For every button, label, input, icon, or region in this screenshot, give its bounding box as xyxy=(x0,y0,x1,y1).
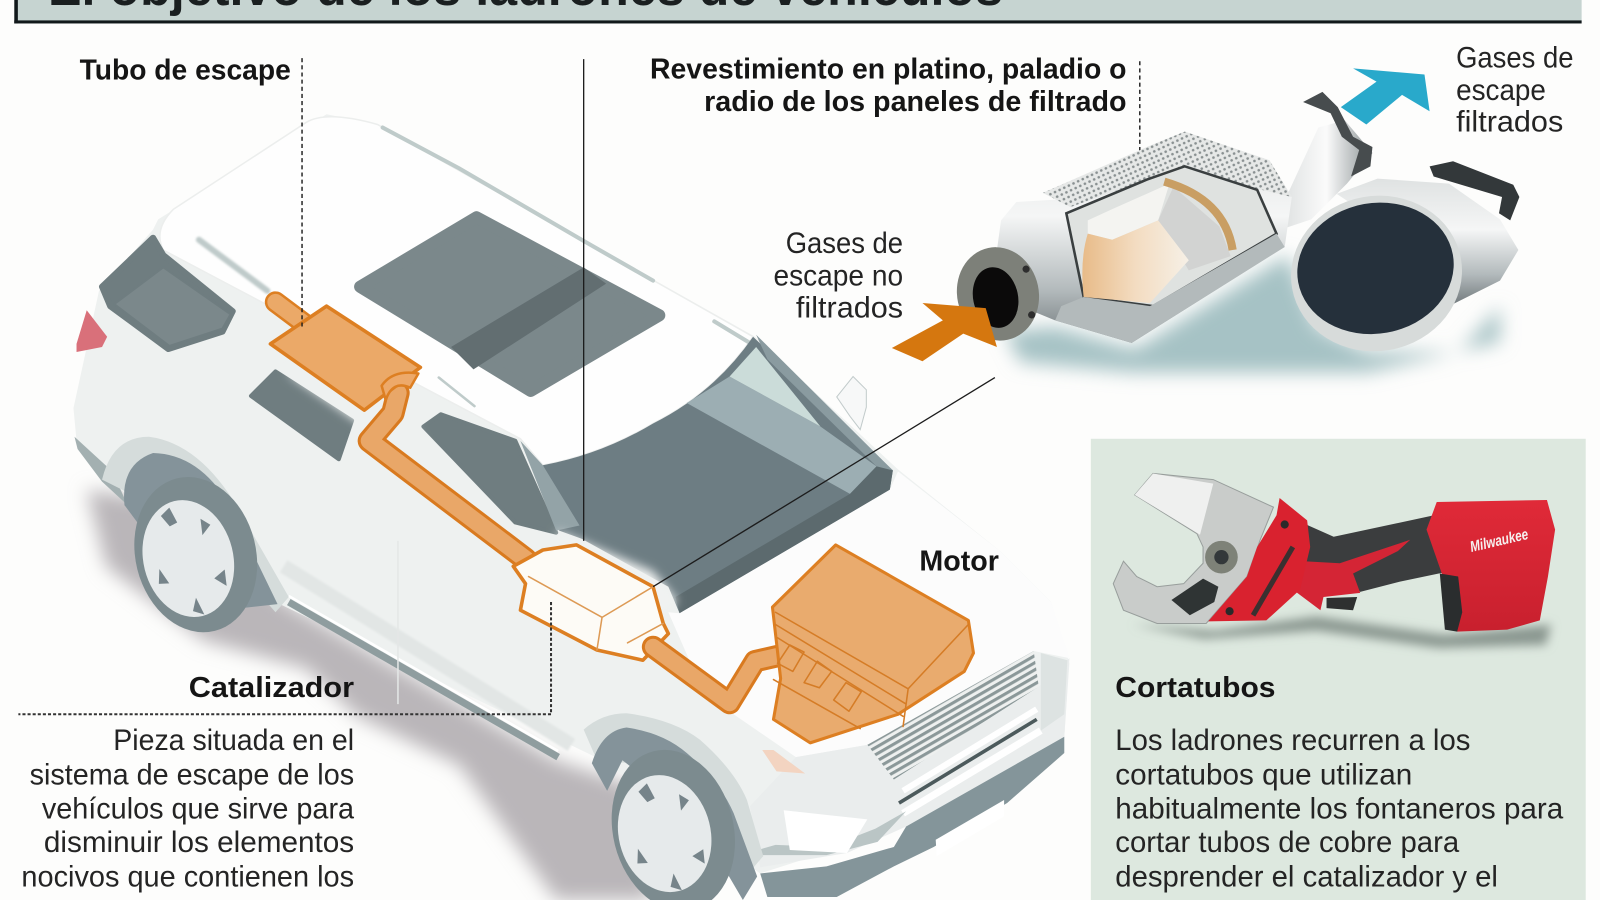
front bumper xyxy=(740,653,1069,897)
exhaust system xyxy=(270,302,973,743)
arch xyxy=(584,713,763,878)
text block: catalizador xyxy=(21,672,355,894)
label: tubo de escape: Tubo de escape xyxy=(80,55,291,87)
silver jaw xyxy=(1113,473,1273,623)
handle xyxy=(1306,514,1449,592)
perforated shield xyxy=(1043,132,1292,207)
label: gases filtrados: filtrados xyxy=(1456,106,1563,139)
leader line: tubo de escape xyxy=(301,58,303,329)
front pipe xyxy=(653,647,791,703)
blade xyxy=(1135,473,1213,535)
red grip accent xyxy=(1296,540,1410,610)
lower tray xyxy=(1055,234,1285,343)
header banner xyxy=(14,0,1582,23)
mid pipe xyxy=(369,393,526,559)
description text: Los ladrones recurren a los xyxy=(1115,724,1470,757)
second converter body xyxy=(1337,179,1518,306)
second bracket xyxy=(1430,161,1519,220)
windshield xyxy=(520,335,893,617)
description text: cortatubos que utilizan xyxy=(1115,759,1412,792)
side sill xyxy=(284,541,571,757)
description text: cortar tubos de cobre para xyxy=(1115,826,1460,859)
ground shadow xyxy=(87,490,653,900)
red body xyxy=(1427,500,1555,632)
engine xyxy=(772,545,973,743)
label: revestimiento: Revestimiento en platino, paladio o xyxy=(650,54,1127,86)
outlet pipe xyxy=(1281,120,1372,230)
label: gases no filtrados xyxy=(773,227,903,324)
label: gases no filtrados: filtrados xyxy=(796,291,903,324)
grille xyxy=(867,651,1039,780)
text block: catalizador: Catalizador xyxy=(189,672,354,704)
tail pipe xyxy=(276,302,308,327)
headlight xyxy=(762,750,805,773)
label: revestimiento xyxy=(650,54,1127,118)
text block: catalizador: Pieza situada en el xyxy=(113,724,354,757)
text block: catalizador: sistema de escape de los xyxy=(30,759,354,792)
leader line: revestimiento xyxy=(1139,61,1141,204)
label: gases filtrados: escape xyxy=(1456,74,1546,107)
arch xyxy=(102,437,289,612)
text block: catalizador: vehículos que sirve para xyxy=(42,792,355,825)
sunroof xyxy=(360,217,659,391)
head slot xyxy=(1253,547,1293,615)
label: gases filtrados xyxy=(1456,41,1573,139)
pivot xyxy=(1205,541,1238,573)
photo shadow xyxy=(1005,255,1500,372)
hood xyxy=(668,471,1069,757)
side mirror xyxy=(837,377,866,430)
front wheel xyxy=(584,713,763,900)
black badge xyxy=(1171,579,1218,615)
arrow: unfiltered gases in xyxy=(892,303,997,361)
rear wheel xyxy=(102,437,289,645)
leader line: diagonal to photo xyxy=(653,378,995,587)
roof xyxy=(160,117,753,465)
panel: cortatubos xyxy=(1091,439,1586,900)
rear lower trim xyxy=(74,437,128,505)
copper ring xyxy=(1164,182,1233,250)
lower dark tab xyxy=(1327,597,1357,610)
catalytic converter xyxy=(513,545,668,660)
icon: pipe cutter tool xyxy=(1113,473,1555,648)
fibre mat xyxy=(1158,187,1231,270)
brand: Milwaukee xyxy=(1469,526,1530,556)
text block: catalizador: nocivos que contienen los xyxy=(21,861,354,894)
roof rails xyxy=(199,128,753,406)
description text: habitualmente los fontaneros para xyxy=(1115,792,1564,825)
filter honeycomb disc xyxy=(1279,182,1474,365)
battery dark edge xyxy=(1440,573,1462,632)
red head xyxy=(1208,498,1310,621)
leader line: catalizador to photo xyxy=(583,59,585,541)
photo: cut-away catalytic converter xyxy=(948,92,1519,372)
ceramic white block xyxy=(1088,184,1169,240)
head bolts xyxy=(1226,520,1289,615)
label: gases no filtrados: Gases de xyxy=(786,227,903,260)
heading: Cortatubos xyxy=(1115,672,1276,704)
outlet bracket xyxy=(1303,92,1372,177)
side windows xyxy=(251,371,556,533)
car body xyxy=(73,114,1069,873)
tail light xyxy=(77,310,107,352)
ceramic filter core xyxy=(1082,220,1189,303)
label: revestimiento: radio de los paneles de filtrado xyxy=(704,86,1127,118)
label: motor: Motor xyxy=(919,545,999,577)
description text xyxy=(1115,724,1564,894)
label: gases filtrados: Gases de xyxy=(1456,41,1573,74)
leader line: catalizador label xyxy=(18,602,551,714)
inlet flange xyxy=(948,239,1048,348)
arrow: filtered gases out xyxy=(1341,68,1430,124)
illustration: car with exhaust system xyxy=(73,114,1069,900)
license plate xyxy=(936,800,1004,856)
rear window xyxy=(102,238,233,349)
muffler xyxy=(270,306,420,410)
description text: desprender el catalizador y el xyxy=(1115,861,1498,894)
interior insulation xyxy=(1066,166,1277,306)
label: gases no filtrados: escape no xyxy=(773,260,903,293)
tool shadow xyxy=(1133,616,1551,648)
text block: catalizador: disminuir los elementos xyxy=(44,826,354,859)
converter body xyxy=(997,132,1292,343)
fog light xyxy=(784,810,867,853)
